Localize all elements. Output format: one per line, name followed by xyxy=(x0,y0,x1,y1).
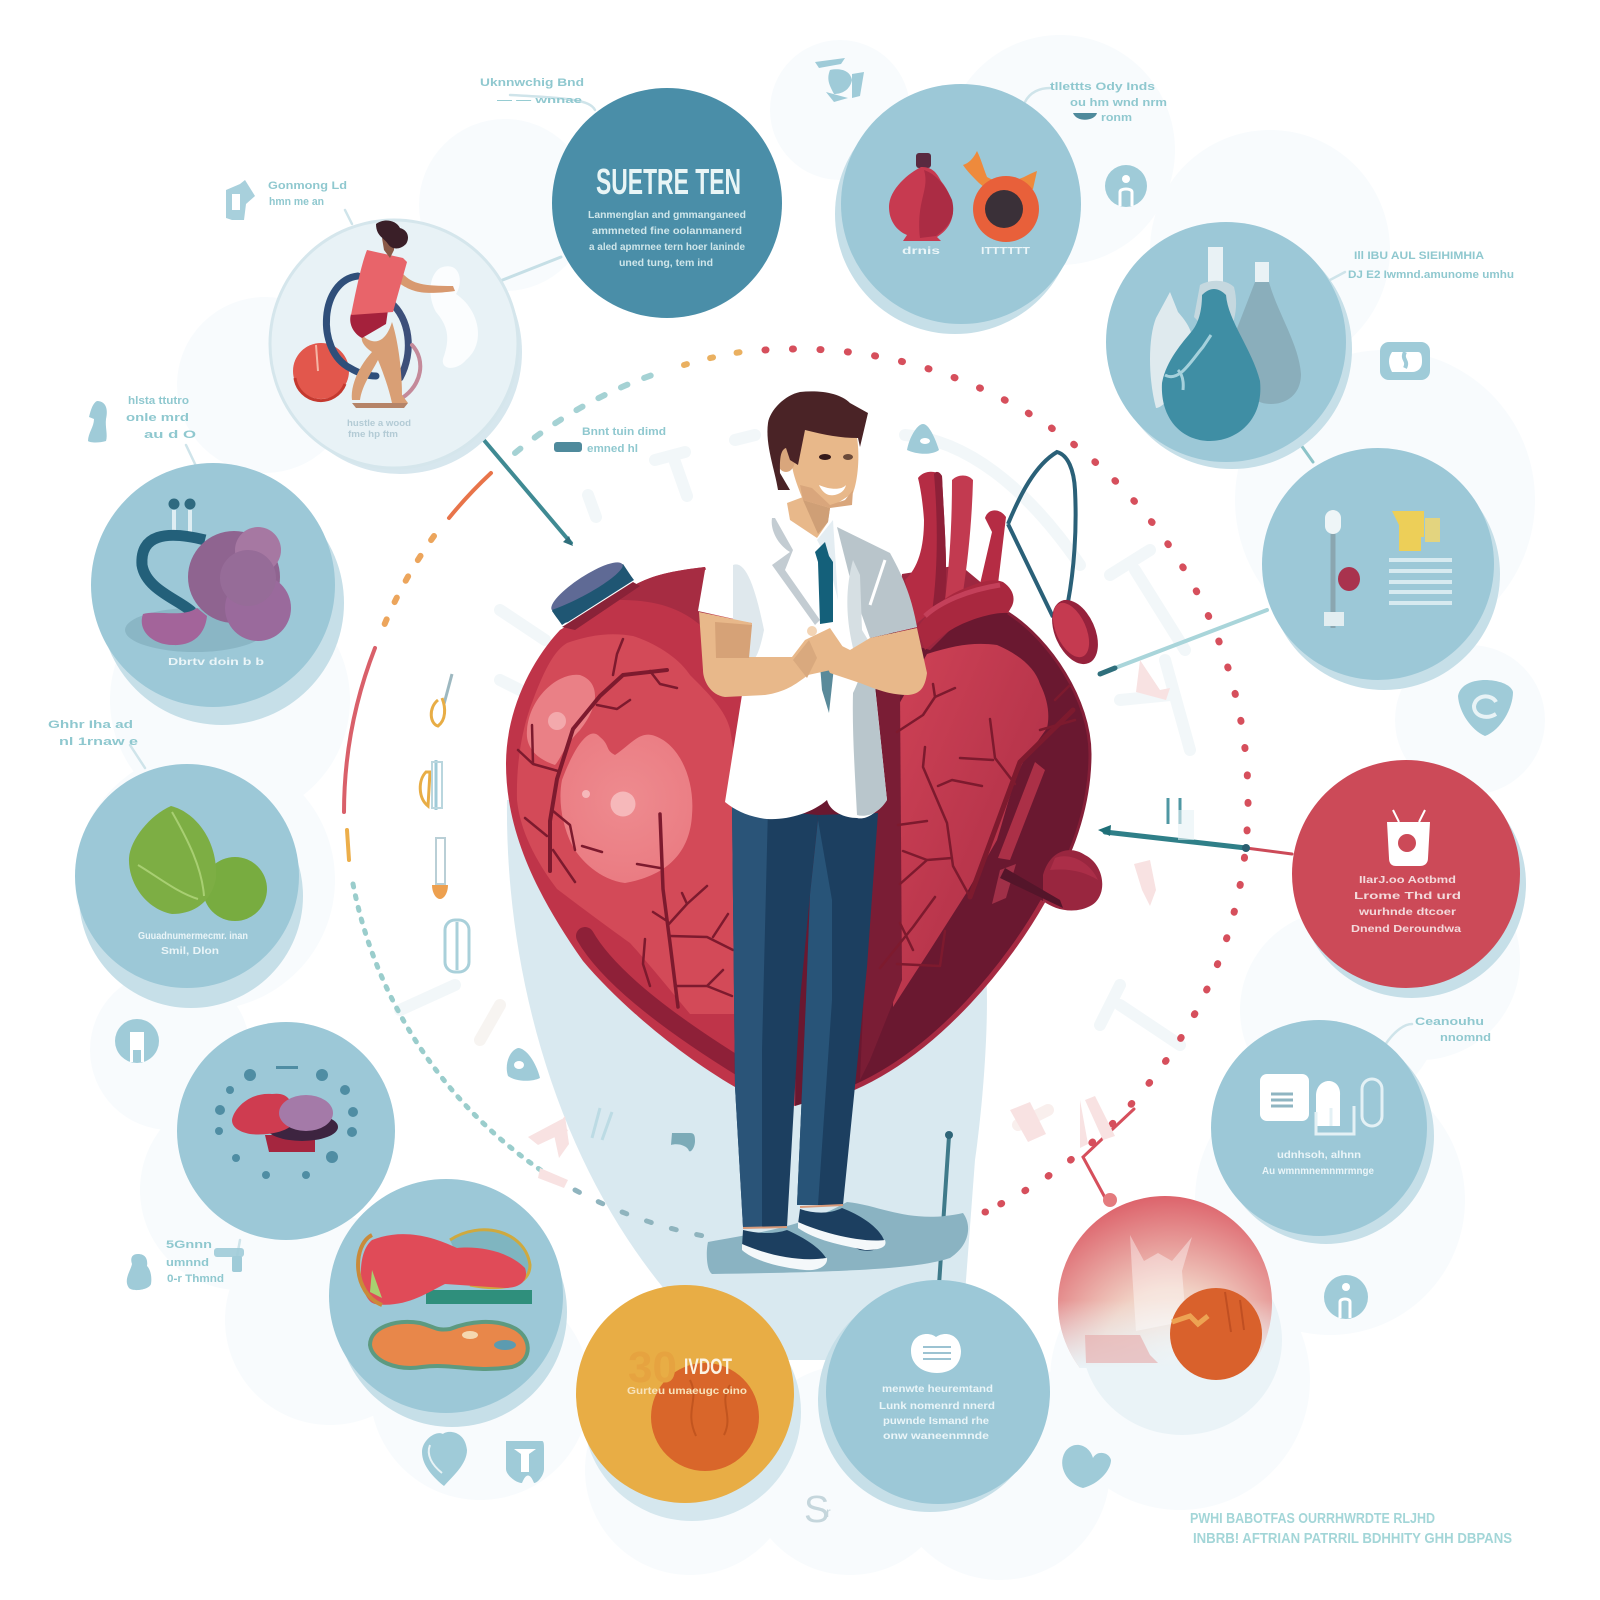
outer labels: ou hm wnd nrm xyxy=(1070,97,1167,109)
outer labels: Gonmong Ld xyxy=(268,180,347,192)
circle: exercise figure xyxy=(270,220,522,474)
outer labels: umnnd xyxy=(166,1257,209,1269)
flasks xyxy=(1150,247,1301,441)
caption: Guuadnumermecmr. inan xyxy=(138,931,248,942)
icon: figure tag xyxy=(88,401,107,442)
head xyxy=(767,391,868,508)
icon: sign shape xyxy=(592,1108,612,1140)
outer labels: au d O xyxy=(144,429,197,441)
orange ball xyxy=(1170,1288,1262,1380)
yellow labels xyxy=(1392,511,1440,551)
body text: wurhnde dtcoer xyxy=(1358,907,1456,918)
outer labels: 5Gnnn xyxy=(166,1239,212,1251)
icon: grey tube xyxy=(432,838,448,899)
stethoscope xyxy=(1008,452,1107,671)
body text: puwnde Ismand rhe xyxy=(883,1416,989,1427)
leader: runner to title circle xyxy=(500,257,561,281)
icon: bracket xyxy=(214,1248,244,1272)
stethoscope xyxy=(142,498,205,612)
circle: red panel xyxy=(1292,760,1526,998)
outer labels: — — wnnae xyxy=(497,95,582,105)
food bottom xyxy=(370,1322,528,1369)
icon: arch badge xyxy=(115,1019,159,1063)
hoop xyxy=(326,276,420,398)
title panel body text: ammneted fine oolanmanerd xyxy=(592,226,742,237)
man xyxy=(698,391,968,1274)
icon: top cluster xyxy=(815,58,864,102)
title panel body text: uned tung, tem ind xyxy=(619,258,713,269)
captions xyxy=(902,246,1030,257)
ghost symbols pink xyxy=(528,660,1170,1188)
circle: title panel xyxy=(552,88,782,318)
icon: orange clip xyxy=(431,674,452,726)
caption xyxy=(138,931,248,957)
body text: Lrome Thd urd xyxy=(1354,891,1461,902)
list bars xyxy=(1389,560,1452,603)
callout line: flame panel xyxy=(1083,1109,1134,1205)
circle: yellow stat xyxy=(576,1285,801,1521)
icon: inner bracket xyxy=(1168,798,1194,840)
icon: dark chip xyxy=(671,1133,695,1151)
legs xyxy=(732,807,878,1227)
heart left side xyxy=(506,567,810,1106)
body text: Dnend Deroundwa xyxy=(1351,924,1462,935)
circle: flasks xyxy=(1106,222,1352,469)
pale backdrop behind man xyxy=(507,800,987,1360)
outer labels xyxy=(48,77,1514,1285)
title panel body text: a aled apmrnee tern hoer laninde xyxy=(589,242,745,253)
icon: S mark: S xyxy=(804,1489,829,1531)
leaves xyxy=(129,806,267,921)
arrow: test panel to heart xyxy=(1100,610,1267,674)
icon: cup xyxy=(1387,810,1430,866)
red organ xyxy=(889,153,953,241)
outer labels: Ill IBU AUL SIEIHIMHIA xyxy=(1354,250,1484,262)
tab xyxy=(1103,1193,1117,1207)
leader lines xyxy=(130,88,1412,1262)
ghost number: 30 xyxy=(628,1343,677,1392)
small arrow: bottle and test panels xyxy=(1292,433,1313,462)
body text: IIarJ.oo Aotbmd xyxy=(1359,875,1456,886)
circle: food xyxy=(329,1179,567,1427)
runner caption: hustle a wood xyxy=(347,418,411,428)
red ball xyxy=(293,343,349,401)
test tube xyxy=(1324,510,1360,628)
shirt xyxy=(698,518,917,819)
title: SUETRE TEN xyxy=(596,161,741,202)
food top xyxy=(358,1230,532,1305)
body text: menwte heuremtand xyxy=(882,1384,993,1395)
heart cap xyxy=(546,555,640,630)
circle: bottle and tube xyxy=(1262,448,1500,690)
circle: green leaves xyxy=(75,764,303,1008)
circle: text panel xyxy=(818,1280,1050,1512)
icons xyxy=(1260,1074,1382,1134)
floor shadow xyxy=(707,1202,968,1274)
dotted ring xyxy=(344,349,1248,1236)
caption xyxy=(1262,1150,1374,1177)
icon: lungs badge xyxy=(911,1334,961,1373)
icon: lower triangle xyxy=(507,1048,540,1081)
neck xyxy=(787,497,830,538)
stat caption: Gurteu umaeugc oino xyxy=(627,1386,747,1397)
outer labels: 0-r Thmnd xyxy=(167,1273,224,1285)
heart veins xyxy=(518,639,1075,1007)
heart vessels xyxy=(895,472,1014,650)
circle: organs xyxy=(835,84,1081,334)
arrow: red panel to heart xyxy=(1098,825,1292,854)
footnote: PWHI BABOTFAS OURRHWRDTE RLJHD xyxy=(1190,1510,1435,1527)
circle: organ cluster xyxy=(177,1022,395,1240)
title panel body text: Lanmenglan and gmmanganeed xyxy=(588,210,746,221)
icon: shield C xyxy=(1458,680,1513,736)
orange ball xyxy=(651,1363,759,1471)
smile xyxy=(819,485,846,495)
outer labels: hmn me an xyxy=(269,196,324,208)
outer labels: Bnnt tuin dimd xyxy=(582,426,666,438)
outer labels: hlsta ttutro xyxy=(128,395,189,407)
captions: drnis xyxy=(902,246,941,257)
ring decorations: faint ghost icons xyxy=(400,435,1190,1125)
dots ring xyxy=(215,1066,358,1179)
organ xyxy=(142,527,291,645)
icon: yellow tube xyxy=(420,760,442,810)
icon: small triangle xyxy=(907,424,939,454)
hair xyxy=(767,391,868,490)
runner caption: fme hp ftm xyxy=(348,429,398,439)
icon: top left glyph xyxy=(226,180,255,220)
ghost figure xyxy=(1130,1235,1192,1331)
outer labels: onle mrd xyxy=(126,412,189,424)
icon: heart right xyxy=(1062,1445,1111,1488)
tie xyxy=(815,542,834,713)
title panel body text xyxy=(588,210,746,269)
heart right side xyxy=(795,607,1090,1106)
footnote xyxy=(1190,1510,1512,1547)
icon: heart left xyxy=(422,1432,467,1486)
shadow xyxy=(125,608,265,652)
body text: Lunk nomenrd nnerd xyxy=(879,1401,995,1412)
outer labels: tllettts Ody Inds xyxy=(1050,81,1155,93)
caption: udnhsoh, alhnn xyxy=(1277,1150,1361,1161)
circle: flame panel xyxy=(1058,1193,1282,1435)
connectors and arrows xyxy=(130,88,1412,1300)
arrow: text panel to feet xyxy=(938,1131,953,1300)
body text: onw waneenmnde xyxy=(883,1431,990,1442)
left arm xyxy=(699,612,845,697)
body text xyxy=(1351,875,1462,935)
icon: T shield xyxy=(506,1441,544,1483)
outer labels: ronm xyxy=(1101,112,1132,124)
outer labels: DJ E2 Iwmnd.amunome umhu xyxy=(1348,269,1514,281)
stat text: IVDOT xyxy=(684,1354,732,1379)
organ mass xyxy=(232,1094,338,1152)
outer labels: nl 1rnaw e xyxy=(59,736,138,748)
icon: info badge xyxy=(1105,165,1147,207)
right arm xyxy=(818,628,927,695)
eyes xyxy=(819,454,853,460)
outer labels: Ghhr Iha ad xyxy=(48,719,133,731)
shoes xyxy=(742,1205,886,1270)
figure xyxy=(350,221,455,408)
runner caption xyxy=(347,418,411,439)
orange valve xyxy=(963,151,1039,242)
neck shadow xyxy=(803,500,830,534)
icon: chip accent xyxy=(554,442,582,452)
heart right bump xyxy=(1000,850,1102,911)
icon: info badge lower xyxy=(1324,1275,1368,1319)
arrow: runner to heart xyxy=(470,424,573,546)
icon: lens accent xyxy=(1073,113,1097,120)
circle: stethoscope and organ xyxy=(91,463,344,725)
caption: Dbrtv doin b b xyxy=(168,657,264,668)
captions: ITTTTTT xyxy=(981,246,1030,257)
icon: person shape xyxy=(127,1254,151,1290)
outer labels: Ceanouhu xyxy=(1415,1016,1484,1028)
outer labels: Uknnwchig Bnd xyxy=(480,77,584,89)
icon: rounded box xyxy=(1380,342,1430,380)
outer labels: nnomnd xyxy=(1440,1032,1491,1044)
white swirl xyxy=(430,266,478,368)
footnote: INBRB! AFTRIAN PATRRIL BDHHITY GHH DBPANS xyxy=(1193,1530,1512,1547)
caption: Smil, Dlon xyxy=(161,946,219,957)
heart xyxy=(506,472,1102,1106)
icon: outlined tube xyxy=(445,920,469,972)
body text xyxy=(879,1384,995,1442)
outer labels: emned hl xyxy=(587,443,638,455)
icon: small mark beside S: r xyxy=(826,1504,831,1520)
caption: Au wmnmnemnmrmnge xyxy=(1262,1166,1374,1177)
circle: supply icons xyxy=(1211,1020,1434,1244)
